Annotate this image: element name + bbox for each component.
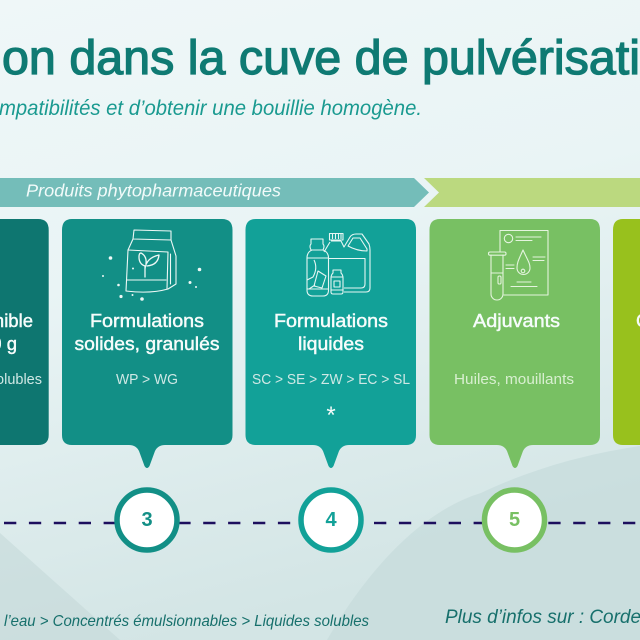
icon: seed bag — [126, 230, 176, 292]
card 3: formulations solides: WP > WG — [116, 372, 178, 388]
title: on dans la cuve de pulvérisati — [2, 32, 640, 85]
card 3: formulations solides — [62, 219, 232, 468]
banner: green section — [424, 178, 640, 207]
subtitle: mpatibilités et d’obtenir une bouillie homogène. — [0, 97, 422, 120]
step marker 3 — [117, 490, 177, 550]
step marker 5 — [484, 490, 544, 550]
card 4: formulations liquides: Formulations — [274, 310, 388, 331]
card 4: formulations liquides: liquides — [298, 333, 364, 354]
step marker 5: 5 — [509, 509, 520, 531]
more info link: Plus d’infos sur : Corde — [445, 607, 640, 628]
footnote: l’eau > Concentrés émulsionnables > Liquides solubles — [4, 613, 369, 630]
card 4: formulations liquides: SC > SE > ZW > EC > SL — [252, 372, 410, 388]
banner: produits phytopharmaceutiques: Produits phytopharmaceutiques — [26, 180, 281, 200]
card 3: formulations solides: Formulations — [90, 310, 204, 331]
icon: test tube and document — [488, 230, 548, 300]
step marker 3: 3 — [141, 509, 153, 531]
icon: bottles and jerrycan — [307, 234, 370, 296]
card 2 partial: soluble — [0, 219, 49, 445]
card 3: formulations solides: solides, granulés — [74, 333, 220, 354]
card 4: formulations liquides — [246, 219, 416, 468]
card 5: adjuvants — [430, 219, 600, 468]
step marker 4 — [301, 490, 361, 550]
asterisk: * — [326, 402, 336, 429]
card 5: adjuvants: Huiles, mouillants — [454, 372, 574, 388]
banner: produits phytopharmaceutiques — [0, 178, 429, 207]
card 6 partial — [613, 219, 640, 445]
timeline dashed line — [4, 522, 640, 524]
icon: scattered granules — [102, 256, 201, 301]
card 5: adjuvants: Adjuvants — [473, 310, 560, 331]
step marker 4: 4 — [325, 509, 337, 531]
